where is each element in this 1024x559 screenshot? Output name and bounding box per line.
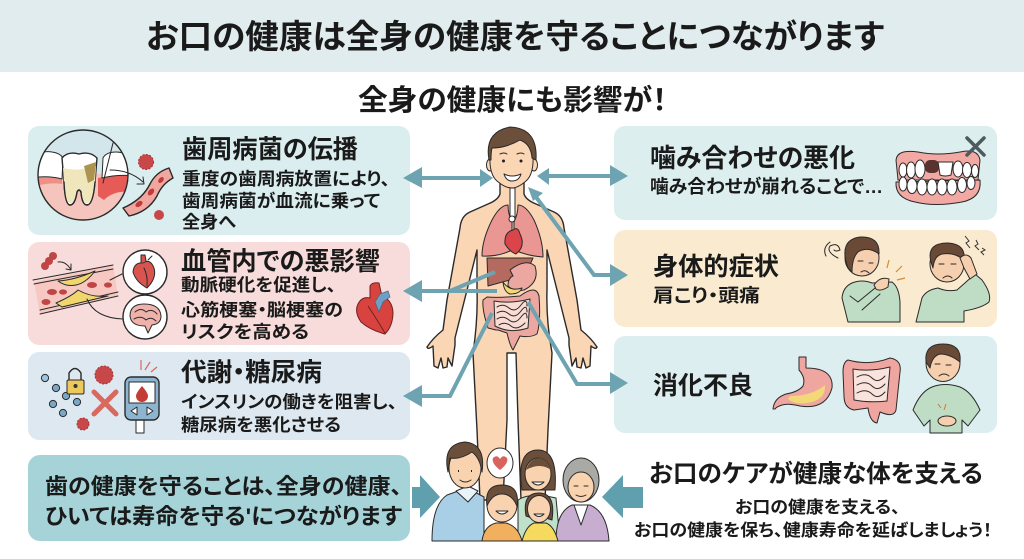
- panel: conclusion: [28, 455, 410, 541]
- grandmother: [556, 458, 609, 541]
- panel: indigestion: 消化不良: [653, 372, 753, 400]
- central body figure: [427, 127, 597, 500]
- blood vessel: [123, 168, 173, 216]
- arrow: head to physical symptoms: [528, 187, 628, 286]
- panel: periodontal bacteria spread: 歯周病菌の伝播: [182, 136, 358, 164]
- panel: effects in blood vessels: リスクを高める: [181, 322, 309, 342]
- girl: [522, 493, 558, 541]
- head: [486, 127, 538, 188]
- arrow into vessel: [110, 170, 143, 182]
- family illustration: [432, 442, 609, 541]
- subtitle: 全身の健康にも影響が！: [358, 83, 667, 117]
- panel: metabolism and diabetes: 糖尿病を悪化させる: [181, 415, 341, 435]
- arrow: caption to family: [602, 475, 643, 518]
- panel: metabolism and diabetes: インスリンの働きを阻害し、: [181, 392, 397, 412]
- icon: brain in circle: [123, 295, 167, 339]
- arrow: left double to head: [403, 167, 493, 188]
- panel: periodontal bacteria spread: 歯周病菌が血流に乗って: [182, 190, 380, 211]
- text block: oral care supports health: お口のケアが健康な体を支える: [649, 459, 983, 488]
- panel: periodontal bacteria spread: 全身へ: [182, 212, 237, 232]
- panel: conclusion: ひいては寿命を守る'につながります: [45, 504, 402, 529]
- panel: metabolism and diabetes: [28, 352, 410, 440]
- panel: bite deterioration: 噛み合わせが崩れることで…: [650, 176, 883, 197]
- icon: person with stiff shoulder: [825, 237, 905, 322]
- panel: indigestion: [614, 336, 997, 433]
- icon: dentures with missing tooth: [896, 138, 984, 204]
- title banner: [0, 0, 1024, 72]
- text block: oral care supports health: [634, 459, 992, 540]
- boy: [482, 485, 522, 541]
- panel: effects in blood vessels: 動脈硬化を促進し、: [181, 275, 336, 295]
- mother: [518, 450, 560, 541]
- text block: oral care supports health: お口の健康を支える、: [735, 497, 900, 517]
- organs: [482, 188, 543, 350]
- icon: tooth cross-section: [30, 130, 173, 224]
- arrow: abdomen to metabolism: [403, 313, 492, 407]
- icon: intestines: [843, 358, 900, 423]
- panel: physical symptoms: 身体的症状: [653, 253, 779, 281]
- panel: effects in blood vessels: [28, 242, 410, 345]
- father: [432, 442, 484, 541]
- panel: metabolism and diabetes: 代謝・糖尿病: [181, 359, 322, 387]
- icon: person holding stomach: [913, 344, 980, 433]
- panel: periodontal bacteria spread: 重度の歯周病放置により、: [182, 169, 390, 189]
- panel: physical symptoms: [614, 230, 997, 327]
- arrow: liver to blood vessel panel: [403, 272, 497, 302]
- icon: heart in circle: [123, 250, 167, 294]
- panel: conclusion: 歯の健康を守ることは、全身の健康、: [45, 474, 402, 499]
- arrow: right double to head: [537, 165, 628, 186]
- panel: effects in blood vessels: 血管内での悪影響: [181, 248, 380, 276]
- icon: anatomical heart: [357, 283, 393, 334]
- text block: oral care supports health: お口の健康を保ち、健康寿命を延ばしましょう！: [634, 521, 992, 540]
- heart speech bubble: [487, 448, 513, 478]
- panel: bite deterioration: 噛み合わせの悪化: [650, 143, 855, 173]
- arrow: conclusion to family: [412, 475, 440, 518]
- title banner: お口の健康は全身の健康を守ることにつながります: [146, 18, 884, 55]
- icon: insulin blocked: [41, 360, 159, 433]
- arrow: intestines to indigestion: [528, 302, 628, 394]
- icon: glucose meter: [136, 418, 144, 433]
- panel: bite deterioration: [614, 126, 997, 220]
- panel: periodontal bacteria spread: [28, 126, 410, 235]
- panel: physical symptoms: 肩こり・頭痛: [653, 285, 760, 306]
- panel: effects in blood vessels: 心筋梗塞・脳梗塞の: [181, 300, 343, 320]
- icon: artery with plaque: [33, 250, 167, 339]
- body outline: [427, 183, 597, 500]
- icon: stomach: [773, 357, 832, 409]
- icon: person with headache: [916, 236, 990, 322]
